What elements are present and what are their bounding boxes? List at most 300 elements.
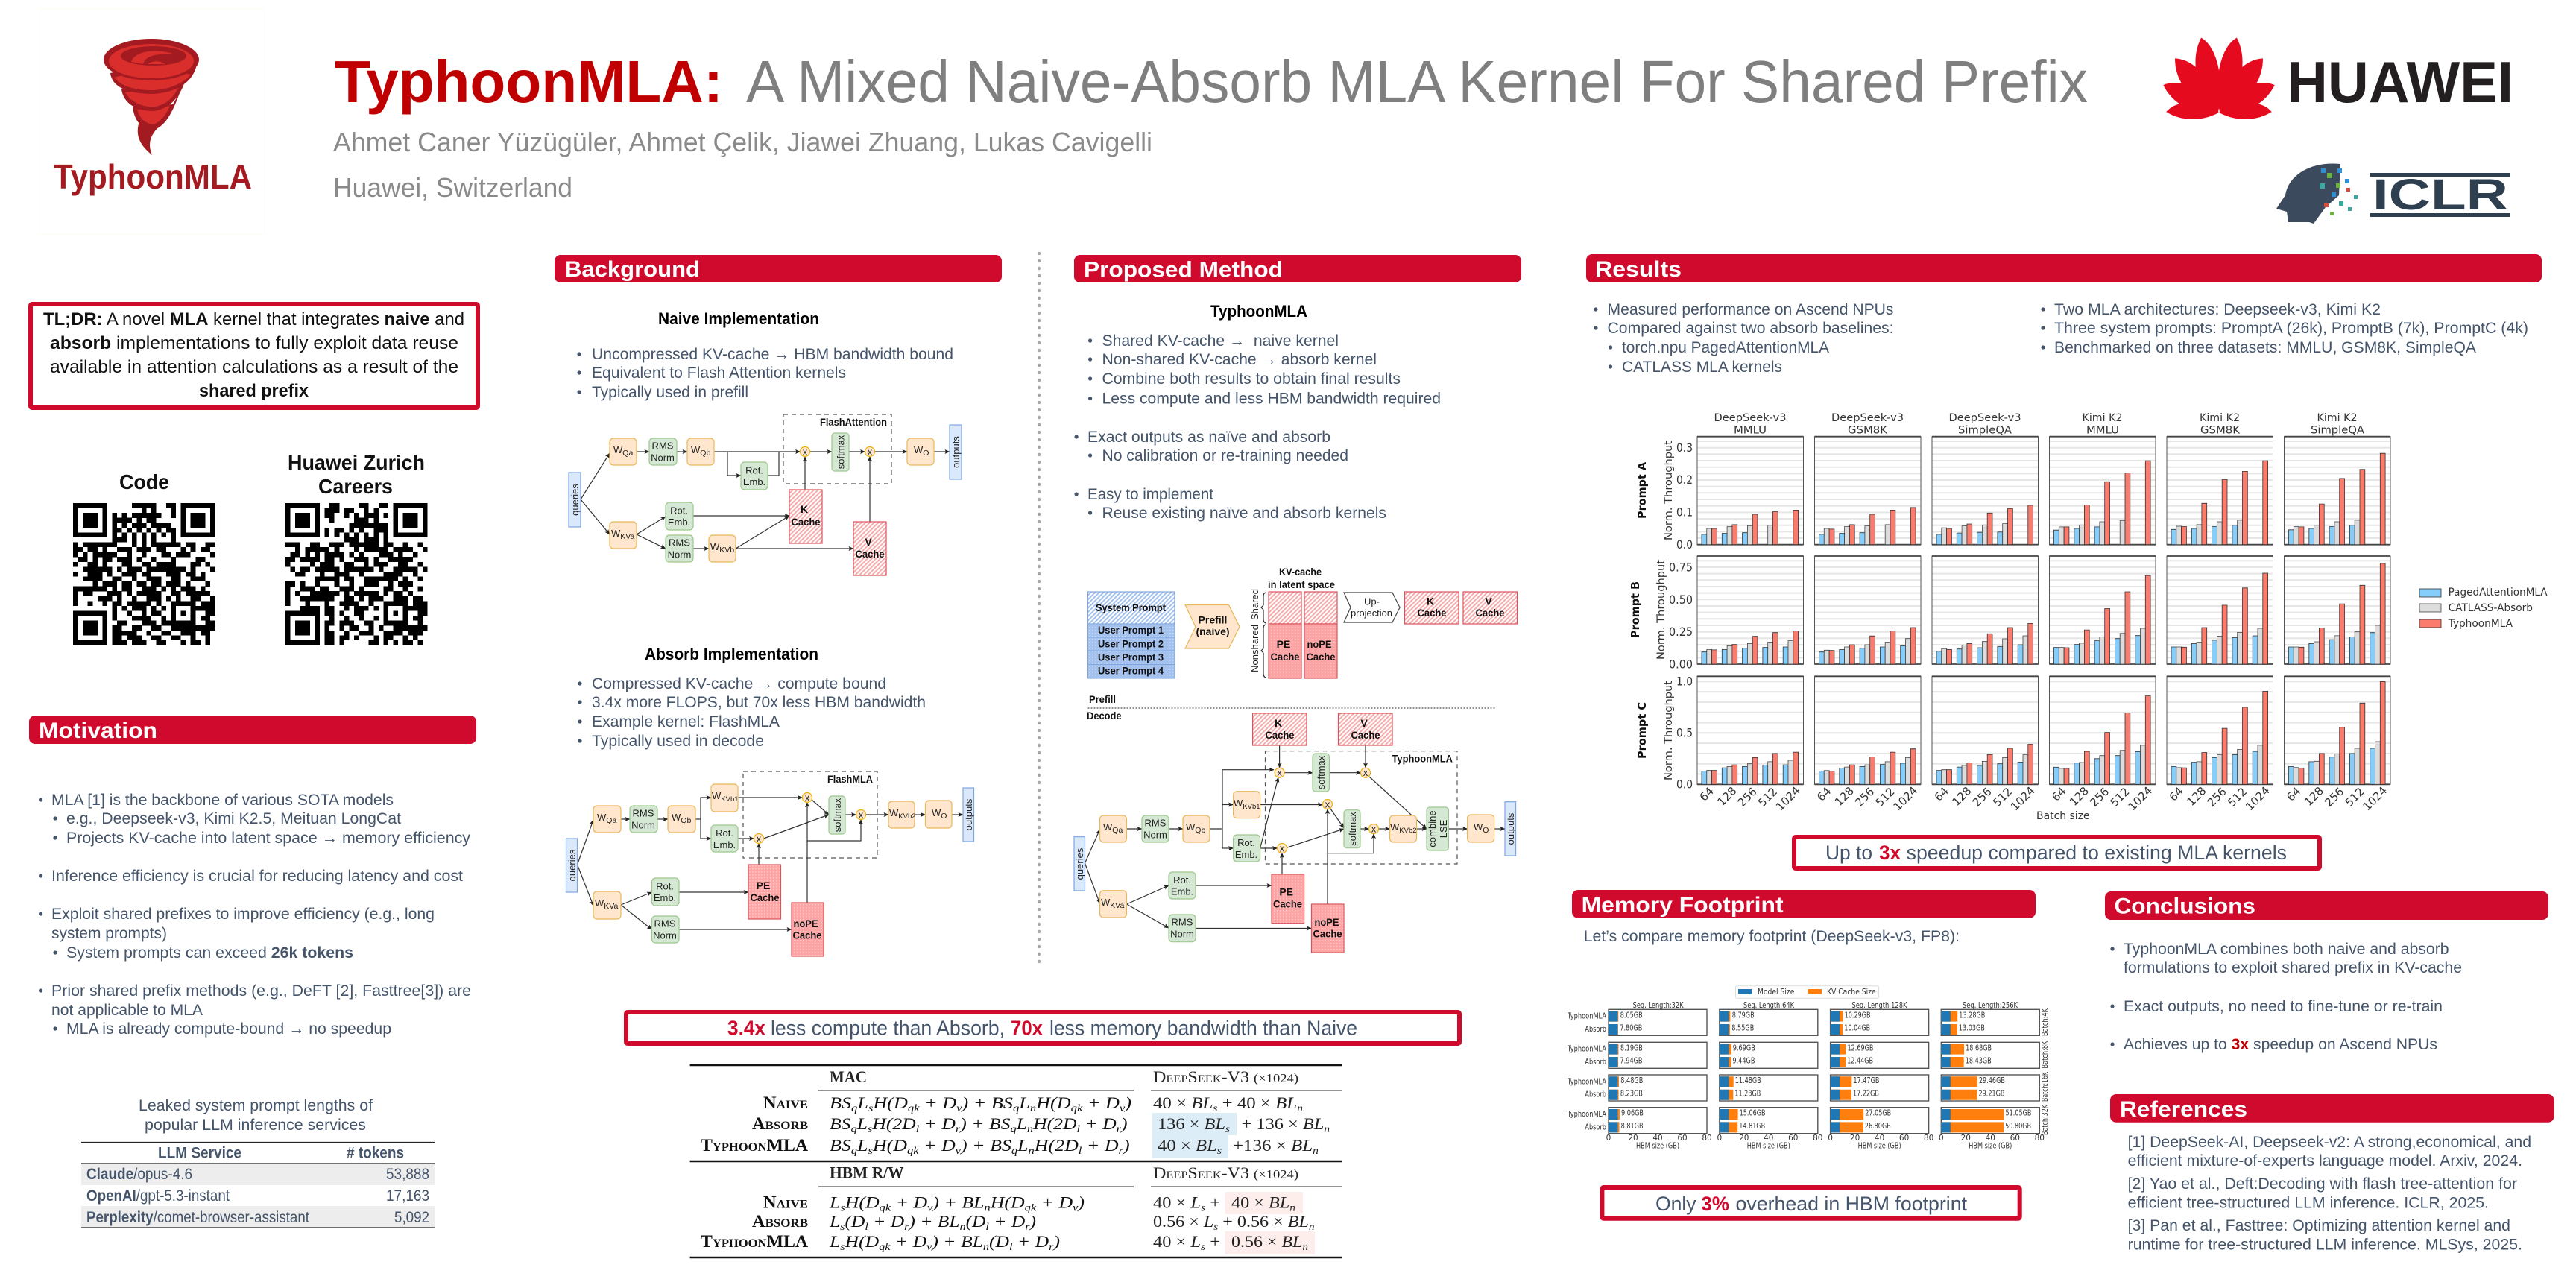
table: MAC and HBM formulas: qk [879,1242,891,1253]
text block: proposed method bullets: Reuse existing naïve and absorb kernels [1102,505,1386,522]
table: leaked system prompt lengths [81,1097,435,1228]
diagram: naive implementation: Rot. [745,465,763,476]
column titles: MMLU [1734,425,1767,437]
row: batch 32K [1609,1108,2039,1134]
labels: method names: TyphoonMLA [1567,1012,1607,1021]
legend: memory chart: KV Cache Size [1827,988,1876,997]
x axis: batch sizes: 128 [2302,784,2326,809]
heading: Conclusions: Conclusions [2114,894,2255,919]
diagram: prefill: (naive) [1196,625,1230,637]
diagram: naive implementation: RMS [652,441,674,452]
table: MAC and HBM formulas: l [985,1222,989,1233]
table: MAC and HBM formulas: 40 × BL [1231,1193,1288,1212]
text block: conclusions: Achieves up to 3x speedup on Ascend NPUs [2124,1036,2437,1053]
table: MAC and HBM formulas: v [1120,1103,1126,1114]
table: MAC and HBM formulas: n [1309,1222,1315,1233]
x axis: batch sizes: 256 [2205,785,2229,809]
x axes: HBM size: 20 [1961,1134,1971,1143]
labels: batch sizes: Batch:32K [2041,1104,2050,1135]
x axis: batch sizes: 512 [2225,785,2250,809]
table: leaked system prompt lengths: 53,888 [386,1166,429,1183]
text block: motivation bullets: MLA [1] is the backbone of various SOTA models [51,792,394,809]
table: leaked system prompt lengths: OpenAI/gpt-5.3-instant [86,1187,230,1205]
diagram: naive implementation: softmax [835,435,847,469]
diagram: naive implementation: queries [569,484,581,516]
table: MAC and HBM formulas: Naive [763,1093,808,1112]
table: MAC and HBM formulas: TyphoonMLA [701,1136,808,1155]
diagram: prefill: User Prompt 3 [1098,651,1164,663]
table: MAC and HBM formulas: s [1201,1203,1206,1214]
diagram: TyphoonMLA decode: softmax [1347,812,1358,846]
table: MAC and HBM formulas: qk [908,1103,920,1114]
row: batch 4K: 8.05GB [1620,1011,1643,1020]
diagram: naive implementation: W [611,528,620,539]
table: MAC and HBM formulas: s [1225,1124,1231,1135]
diagram: absorb implementation: KVb2 [898,812,916,821]
column titles: SimpleQA [2311,425,2364,437]
text block: absorb bullets: Typically used in decode [592,733,764,750]
table: MAC and HBM formulas: v [926,1242,932,1253]
table: MAC and HBM formulas: q [1013,1103,1019,1114]
x axis: batch sizes: 256 [1852,785,1877,809]
row: Prompt C: Prompt C [1635,702,1649,759]
diagram: absorb implementation: softmax [832,798,843,832]
table: MAC and HBM formulas: l [1009,1242,1013,1253]
x axis: batch sizes [1697,784,2390,822]
labels: method names: TyphoonMLA [1567,1077,1607,1086]
diagram: absorb implementation: x [805,792,810,804]
table: MAC and HBM formulas: v [956,1103,962,1114]
text block: motivation bullets: Inference efficiency is crucial for reducing latency and cost [51,868,463,885]
diagram: TyphoonMLA decode: KVb2 [1399,827,1417,835]
table: MAC and HBM formulas: n [1324,1124,1330,1135]
row: Prompt C: 1.0 [1676,674,1693,689]
diagram: TyphoonMLA decode: RMS [1172,917,1193,927]
text block: proposed method bullets [1075,332,1441,522]
text block: motivation bullets: Prior shared prefix methods (e.g., DeFT [2], Fasttree[3]) are [51,982,471,1000]
column titles: DeepSeek-v3 [1831,412,1904,424]
column titles: DeepSeek-v3 [1714,412,1786,424]
table: MAC and HBM formulas: ) [1028,1212,1036,1231]
diagram: TyphoonMLA decode: Norm [1170,929,1194,939]
row: batch 16K [1609,1075,2039,1101]
table: MAC and HBM formulas: r [1049,1242,1054,1253]
diagram: TyphoonMLA decode: Rot. [1237,837,1255,848]
text block: memory intro: Let’s compare memory footprint (DeepSeek-v3, FP8): [1584,928,1960,945]
x axis: batch sizes: 1024 [2360,784,2390,813]
table: MAC and HBM formulas: (D [989,1232,1009,1251]
table: MAC and HBM formulas: r [904,1222,909,1233]
heading: Conclusions [2105,891,2548,920]
diagram: TyphoonMLA decode: TyphoonMLA [1392,753,1453,765]
row: Prompt A: Prompt A [1635,462,1649,519]
row: batch 8K [1609,1042,2039,1068]
diagram: TyphoonMLA decode: Rot. [1173,874,1191,886]
labels: column titles [1633,1001,2018,1010]
diagram: TyphoonMLA decode [1074,713,1516,953]
callout: 3x speedup [1794,837,2320,868]
labels: column titles: Seq. Length:128K [1852,1001,1907,1010]
x axis: batch sizes: 256 [2087,785,2112,809]
label: prefill and decode separator: Prefill [1089,693,1116,705]
x axis: batch sizes: 64 [2049,784,2068,804]
diagram: TyphoonMLA decode: Emb. [1171,886,1193,897]
table: MAC and HBM formulas: + 40 × [1217,1093,1275,1112]
table: MAC and HBM formulas: l [1077,1124,1080,1135]
x axis: batch sizes: 64 [1814,784,1834,804]
table: MAC and HBM formulas: ) [1076,1193,1085,1212]
diagram: prefill: Cache [1418,607,1447,619]
row: Prompt C: 0.0 [1676,777,1693,792]
table: MAC and HBM formulas: Naive [763,1193,808,1212]
x axes: HBM size: 40 [1764,1134,1773,1143]
diagram: absorb implementation: Norm [653,930,677,941]
text block: proposed method bullets: No calibration or re-training needed [1102,447,1348,464]
text block: motivation bullets: MLA is already compute-bound → no speedup [66,1020,391,1038]
diagram: absorb implementation: x [757,833,762,844]
logo: ICLR: ICLR [2373,171,2508,219]
diagram: naive implementation: x [803,446,808,458]
row: batch 8K: 12.44GB [1847,1057,1873,1066]
x axes: HBM size: 20 [1628,1134,1638,1143]
column titles: SimpleQA [1958,425,2012,437]
labels: method names: Absorb [1585,1123,1606,1131]
logo: TyphoonMLA tornado [40,9,265,234]
labels: column titles: Seq. Length:256K [1963,1001,2018,1010]
row: batch 4K: 13.03GB [1959,1024,1985,1033]
text block: results bullets: Benchmarked on three datasets: MMLU, GSM8K, SimpleQA [2054,339,2476,356]
heading: Background: Background [565,257,700,282]
row: Prompt B: 0.75 [1669,561,1693,574]
QR code: Huawei Zurich Careers: Careers [318,475,393,498]
row: batch 4K: 13.28GB [1959,1011,1985,1020]
x axis: batch sizes: 512 [1990,785,2015,809]
diagram: absorb implementation: W [712,790,721,801]
text block: absorb bullets: Compressed KV-cache → compute bound [592,675,886,692]
labels: column titles: Seq. Length:32K [1633,1001,1684,1010]
x axes: HBM size: 0 [1606,1134,1611,1143]
x axes: HBM size: 40 [1652,1134,1663,1143]
x axes: HBM size: 60 [1788,1134,1798,1143]
x axis: batch sizes: 64 [2284,784,2303,804]
heading: Motivation [29,716,476,744]
diagram: naive implementation: outputs [950,436,962,468]
diagram: prefill: projection [1351,607,1392,619]
table: MAC and HBM formulas: 40 × BL [1153,1093,1210,1112]
diagram: prefill: noPE [1307,638,1331,650]
row: Prompt A: 0.3 [1676,441,1693,455]
row: batch 8K: 18.43GB [1966,1057,1992,1066]
QR code: Huawei Zurich Careers: Huawei Zurich [288,451,425,474]
text block: absorb bullets [578,675,926,750]
diagram: absorb implementation: W [889,807,898,818]
table: MAC and HBM formulas: s [868,1146,874,1157]
diagram: prefill: User Prompt 4 [1098,665,1164,677]
row: Prompt B: Prompt B [1629,581,1642,638]
callout: compute and bandwidth: less compute than Absorb, [771,1017,1005,1040]
text block: references [2128,1134,2531,1254]
row: batch 8K: 12.69GB [1848,1044,1874,1052]
text block: references: efficient mixture-of-experts language model. Arxiv, 2024. [2128,1152,2522,1169]
callout: compute and bandwidth: less memory bandwidth than Naive [1049,1017,1357,1040]
table: MAC and HBM formulas: 40 × L [1153,1193,1200,1212]
callout: 3x speedup: 3x [1879,842,1901,864]
table: leaked system prompt lengths: Perplexity/comet-browser-assistant [86,1209,309,1226]
diagram: TyphoonMLA decode: Qa [1112,826,1123,835]
row: batch 16K: 8.48GB [1620,1076,1643,1085]
x axis: batch sizes: 512 [2343,785,2367,809]
table: MAC and HBM formulas: 0.56 × L [1153,1212,1213,1231]
table: MAC and HBM formulas: L [1017,1136,1029,1155]
table: MAC and HBM formulas: H(2D [1034,1136,1079,1155]
diagram: absorb implementation: queries [566,849,578,881]
x axis: batch sizes: 512 [1755,785,1780,809]
bar chart: HBM footprint [1567,986,2050,1151]
diagram: naive implementation: Norm [668,549,691,561]
table: MAC and HBM formulas: q [1010,1124,1017,1135]
text block: results bullets: CATLASS MLA kernels [1622,359,1782,376]
table: MAC and HBM formulas: ) [1123,1093,1131,1112]
table: MAC and HBM formulas: BS [830,1136,847,1155]
labels: method names: Absorb [1585,1025,1606,1034]
table: MAC and HBM formulas: H(2D [1032,1114,1077,1133]
subheading: Naive Implementation: Naive Implementation [658,309,819,328]
column titles: GSM8K [1848,425,1888,437]
text block: naive bullets [577,346,953,401]
x axis: batch sizes: 128 [1714,784,1739,809]
table: MAC and HBM formulas: + D [1082,1136,1119,1155]
table: leaked system prompt lengths: # tokens [347,1145,404,1161]
table: MAC and HBM formulas: q [851,1103,857,1114]
table: MAC and HBM formulas: L [830,1212,839,1231]
text block: references: [1] DeepSeek-AI, Deepseek-v2: A strong,economical, and [2128,1134,2531,1151]
table: MAC and HBM formulas: H(D [1035,1093,1071,1112]
table: MAC and HBM formulas: r [1117,1124,1122,1135]
diagram: naive implementation: FlashAttention [820,416,887,428]
table: MAC and HBM formulas: v [956,1146,962,1157]
table: MAC and HBM formulas: q [1011,1146,1017,1157]
title: A Mixed Naive-Absorb MLA Kernel For Shared Prefix [746,48,2088,115]
labels: column titles: Seq. Length:64K [1743,1001,1795,1010]
table: MAC and HBM formulas: (D [845,1212,865,1231]
diagram: naive implementation: RMS [669,537,690,549]
diagram: TyphoonMLA decode: outputs [1505,812,1516,845]
table: MAC and HBM formulas: v [927,1203,933,1214]
diagram: prefill: in latent space [1268,578,1335,590]
table: leaked system prompt lengths: 17,163 [386,1187,429,1205]
table: MAC and HBM formulas: v [1073,1203,1079,1214]
row: batch 32K: 50.80GB [2005,1122,2031,1131]
x axis: batch sizes: 64 [1697,784,1717,804]
diagram: absorb implementation: RMS [654,918,676,929]
text block: results bullets [1594,301,2528,376]
text block: motivation bullets: system prompts) [51,925,167,942]
diagram: TyphoonMLA decode: KVb1 [1243,803,1260,811]
x axes: HBM size: HBM size (GB) [1636,1142,1679,1151]
text block: motivation bullets [39,792,471,1038]
column titles: Kimi K2 [2200,412,2240,424]
row: Prompt A [1635,440,2385,552]
table: MAC and HBM formulas: qk [1071,1103,1083,1114]
diagram: TyphoonMLA decode: W [1186,821,1195,833]
text block: motivation bullets: Exploit shared prefixes to improve efficiency (e.g., long [51,906,435,923]
row: batch 32K: 8.81GB [1621,1122,1644,1131]
diagram: prefill: Up- [1364,596,1380,607]
callout: 3x speedup: Up to [1825,842,1872,864]
x axis: batch sizes: 128 [2184,784,2209,809]
x axes: HBM size: 80 [1924,1134,1933,1143]
legend: chart series: CATLASS-Absorb [2449,602,2533,614]
table: MAC and HBM formulas: L [830,1193,839,1212]
diagram: naive implementation: Norm [651,452,675,464]
table: MAC and HBM formulas: H(2D [871,1114,916,1133]
table: MAC and HBM formulas: n [1313,1146,1319,1157]
row: batch 16K: 29.21GB [1979,1089,2005,1098]
diagram: absorb implementation: Cache [793,929,822,941]
diagram: naive implementation: W [914,444,923,455]
labels: batch sizes: Batch:8K [2041,1041,2050,1069]
table: MAC and HBM formulas: ) + BL [907,1212,959,1231]
diagram: TyphoonMLA decode: Norm [1143,829,1167,841]
diagram: naive implementation: V [865,536,872,548]
table: MAC and HBM formulas: ) [1122,1136,1130,1155]
diagram: TyphoonMLA decode: Cache [1266,729,1295,741]
legend: memory chart: Model Size [1758,988,1794,997]
diagram: absorb implementation: Qa [606,816,616,825]
table: MAC and HBM formulas: l [916,1124,919,1135]
table: MAC and HBM formulas: H(D [872,1093,908,1112]
table: MAC and HBM formulas: (D [966,1212,986,1231]
table: MAC and HBM formulas: q [851,1146,857,1157]
row: batch 8K: 8.19GB [1620,1044,1643,1052]
table: MAC and HBM formulas: n [1289,1203,1295,1214]
table: MAC and HBM formulas: r [1025,1222,1030,1233]
x axes: HBM size: 80 [2035,1134,2045,1143]
table: MAC and HBM formulas: qk [880,1203,891,1214]
row: batch 16K: 29.46GB [1979,1076,2005,1085]
diagram: prefill: Shared [1249,589,1260,620]
diagram: absorb implementation: Emb. [654,892,676,903]
text block: proposed method bullets: Easy to implement [1087,486,1213,503]
column titles: Kimi K2 [2083,412,2123,424]
table: MAC and HBM formulas: BS [830,1093,847,1112]
table: MAC and HBM formulas: H(D [872,1136,907,1155]
table: MAC and HBM formulas: n [959,1222,966,1233]
diagram: naive implementation [569,414,962,575]
x axis: batch sizes: 1024 [1890,784,1920,813]
heading: Results [1586,254,2542,282]
diagram: absorb implementation: W [597,812,606,823]
subheading: Absorb Implementation: Absorb Implementation [645,645,818,663]
table: MAC and HBM formulas: s [1213,1103,1218,1114]
table: MAC and HBM formulas: L [856,1093,868,1112]
labels: batch sizes [2041,1008,2050,1135]
table: MAC and HBM formulas: + D [989,1212,1025,1231]
diagram: TyphoonMLA decode: x [1325,799,1330,809]
diagram: prefill: User Prompt 2 [1098,638,1164,650]
diagram: naive implementation: Cache [856,548,885,560]
callout: 3x speedup: speedup compared to existing MLA kernels [1907,842,2287,864]
text block: proposed method bullets: Less compute and less HBM bandwidth required [1102,391,1441,407]
diagram: prefill [1088,566,1518,678]
diagram: naive implementation: Emb. [743,476,765,487]
diagram: absorb implementation: W [595,897,604,909]
heading: Motivation: Motivation [39,719,157,743]
diagram: naive implementation: W [691,444,700,455]
x axes: HBM size: 80 [1813,1134,1822,1143]
affiliation: Huawei, Switzerland [333,172,572,203]
row: batch 32K: 51.05GB [2006,1109,2032,1118]
diagram: TyphoonMLA decode: LSE [1438,819,1449,838]
heading: Memory Footprint: Memory Footprint [1582,893,1784,918]
table: MAC and HBM formulas: 0.56 × BL [1231,1232,1301,1251]
table: MAC and HBM formulas: + D [919,1136,956,1155]
diagram: prefill: Cache [1476,607,1505,619]
table: MAC and HBM formulas: + D [1080,1114,1117,1133]
table: leaked system prompt lengths: Leaked system prompt lengths of [139,1097,373,1114]
diagram: TyphoonMLA decode: W [1103,821,1112,833]
diagram: absorb implementation: Qb [681,816,691,825]
subheading: TyphoonMLA: TyphoonMLA [1210,302,1307,321]
table: MAC and HBM formulas: TyphoonMLA [701,1232,808,1251]
diagram: naive implementation: Cache [792,516,821,528]
labels: method names [1567,1012,1607,1131]
diagram: naive implementation: O [923,449,929,458]
diagram: absorb implementation: O [941,812,947,821]
table: MAC and HBM formulas: r [1119,1146,1124,1157]
text block: motivation bullets: System prompts can exceed 26k tokens [66,944,353,962]
callout: TL;DR: shared prefix [199,381,309,401]
legend: memory chart [1735,986,1878,998]
table: MAC and HBM formulas: s [1201,1242,1206,1253]
row: Prompt B: 0.25 [1669,625,1693,639]
table: MAC and HBM formulas: n [1027,1124,1033,1135]
text block: references: [3] Pan et al., Fasttree: Optimizing attention kernel and [2128,1217,2510,1234]
diagram: TyphoonMLA decode: x [1280,842,1285,854]
column titles: Kimi K2 [2317,412,2357,424]
text block: absorb bullets: Example kernel: FlashMLA [592,713,780,730]
callout: 3% overhead: Only [1655,1193,1696,1215]
table: MAC and HBM formulas: q [851,1124,857,1135]
x axis: batch sizes: 128 [1949,784,1974,809]
text block: results bullets: Two MLA architectures: Deepseek-v3, Kimi K2 [2054,301,2381,318]
diagram: absorb implementation: FlashMLA [827,773,873,785]
diagram: naive implementation: K [801,503,808,515]
x axes: HBM size: HBM size (GB) [1969,1142,2012,1151]
diagram: absorb implementation [566,771,974,956]
row: Prompt B: Norm. Throughput [1655,559,1667,660]
row: batch 4K: 8.55GB [1731,1024,1754,1033]
column titles [1714,412,2364,437]
diagram: absorb implementation: KVa [604,902,619,911]
table: leaked system prompt lengths: Claude/opus-4.6 [86,1166,192,1183]
table: MAC and HBM formulas: ) [1120,1114,1128,1133]
text block: proposed method bullets: Combine both results to obtain final results [1102,370,1401,388]
table: MAC and HBM formulas: s [1217,1146,1222,1157]
diagram: absorb implementation: Norm [631,820,655,830]
heading: References [2110,1094,2554,1123]
x axis: batch sizes: 256 [1970,785,1995,809]
diagram: TyphoonMLA decode: x [1277,767,1282,778]
table: MAC and HBM formulas: s [868,1103,874,1114]
legend: chart series: PagedAttentionMLA [2449,587,2548,599]
table: MAC and HBM formulas: + D [891,1232,926,1251]
diagram: TyphoonMLA decode: combine [1427,810,1438,847]
table: leaked system prompt lengths: popular LLM inference services [145,1117,366,1134]
diagram: naive implementation: KVb [719,546,734,555]
diagram: TyphoonMLA decode: W [1390,821,1399,833]
row: batch 16K: 11.23GB [1734,1089,1761,1098]
